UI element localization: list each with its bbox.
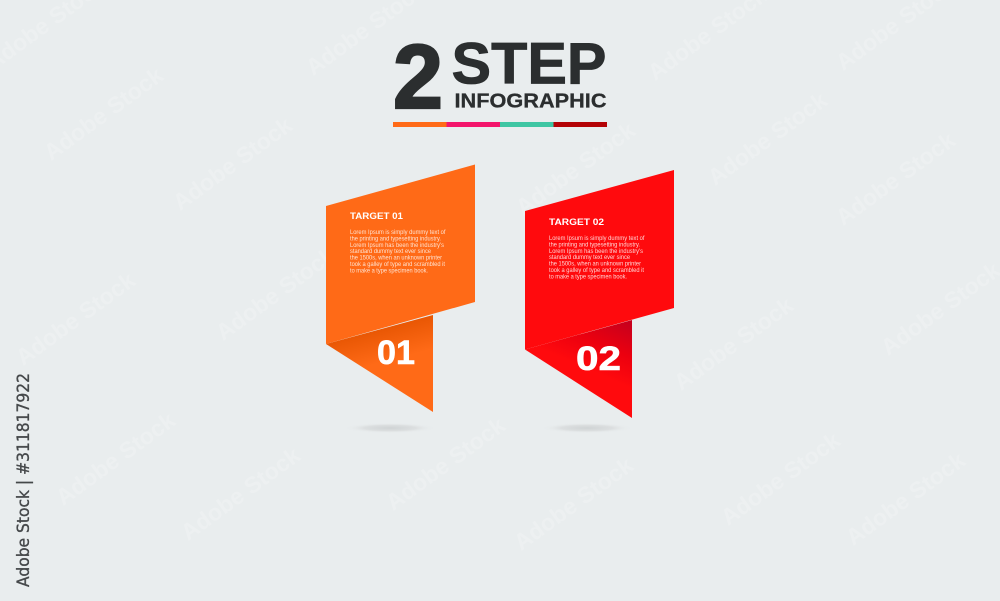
panel: target 01 [326,164,475,412]
body text [350,230,446,274]
watermarks: Adobe Stock [511,117,640,220]
banner main [525,170,674,350]
watermarks: Adobe Stock [703,87,832,190]
watermarks: Adobe Stock [669,292,798,395]
watermarks: Adobe Stock [841,447,970,550]
number 02: 02 [576,340,621,378]
body text: Lorem Ipsum has been the industry's [549,249,643,255]
shadow: target 02 [543,423,631,433]
shadow: target 01 [346,423,434,433]
heading: target 01: TARGET 01 [350,211,404,222]
body text: Lorem Ipsum is simply dummy text of [350,230,446,236]
heading: target 02: TARGET 02 [549,217,604,228]
title number 2: 2 [393,27,443,128]
watermarks: Adobe Stock [176,442,305,545]
number 01: 01 [377,334,415,372]
watermarks: Adobe Stock [168,112,297,215]
watermarks: Adobe Stock [716,427,845,530]
body text: to make a type specimen book. [549,274,627,280]
body text: the 1500s, when an unknown printer [350,256,442,262]
body text: took a galley of type and scrambled it [549,268,644,274]
body text: standard dummy text ever since [549,255,631,261]
watermarks: Adobe Stock [211,242,340,345]
body text: Lorem Ipsum has been the industry's [350,243,444,249]
stock credit: Adobe Stock | #311817922 [14,373,34,587]
body text: the printing and typesetting industry. [350,236,441,242]
watermarks: Adobe Stock [51,407,180,510]
watermarks: Adobe Stock [831,127,960,230]
body text: the 1500s, when an unknown printer [549,262,641,268]
colour bar [393,122,607,127]
body text: standard dummy text ever since [350,249,432,255]
watermarks: Adobe Stock [11,267,140,370]
banner main [326,164,475,344]
banner tail [525,320,632,418]
body text [549,236,645,280]
title [393,27,606,128]
body text: the printing and typesetting industry. [549,242,640,248]
watermarks: Adobe Stock [509,452,638,555]
body text: took a galley of type and scrambled it [350,262,445,268]
banner tail [326,315,433,412]
body text: Lorem Ipsum is simply dummy text of [549,236,645,242]
watermarks: Adobe Stock [39,62,168,165]
watermarks: Adobe Stock [381,412,510,515]
body text: to make a type specimen book. [350,268,428,274]
title word INFOGRAPHIC: INFOGRAPHIC [454,90,606,112]
title word STEP: STEP [452,32,606,96]
panel: target 02 [525,170,674,418]
